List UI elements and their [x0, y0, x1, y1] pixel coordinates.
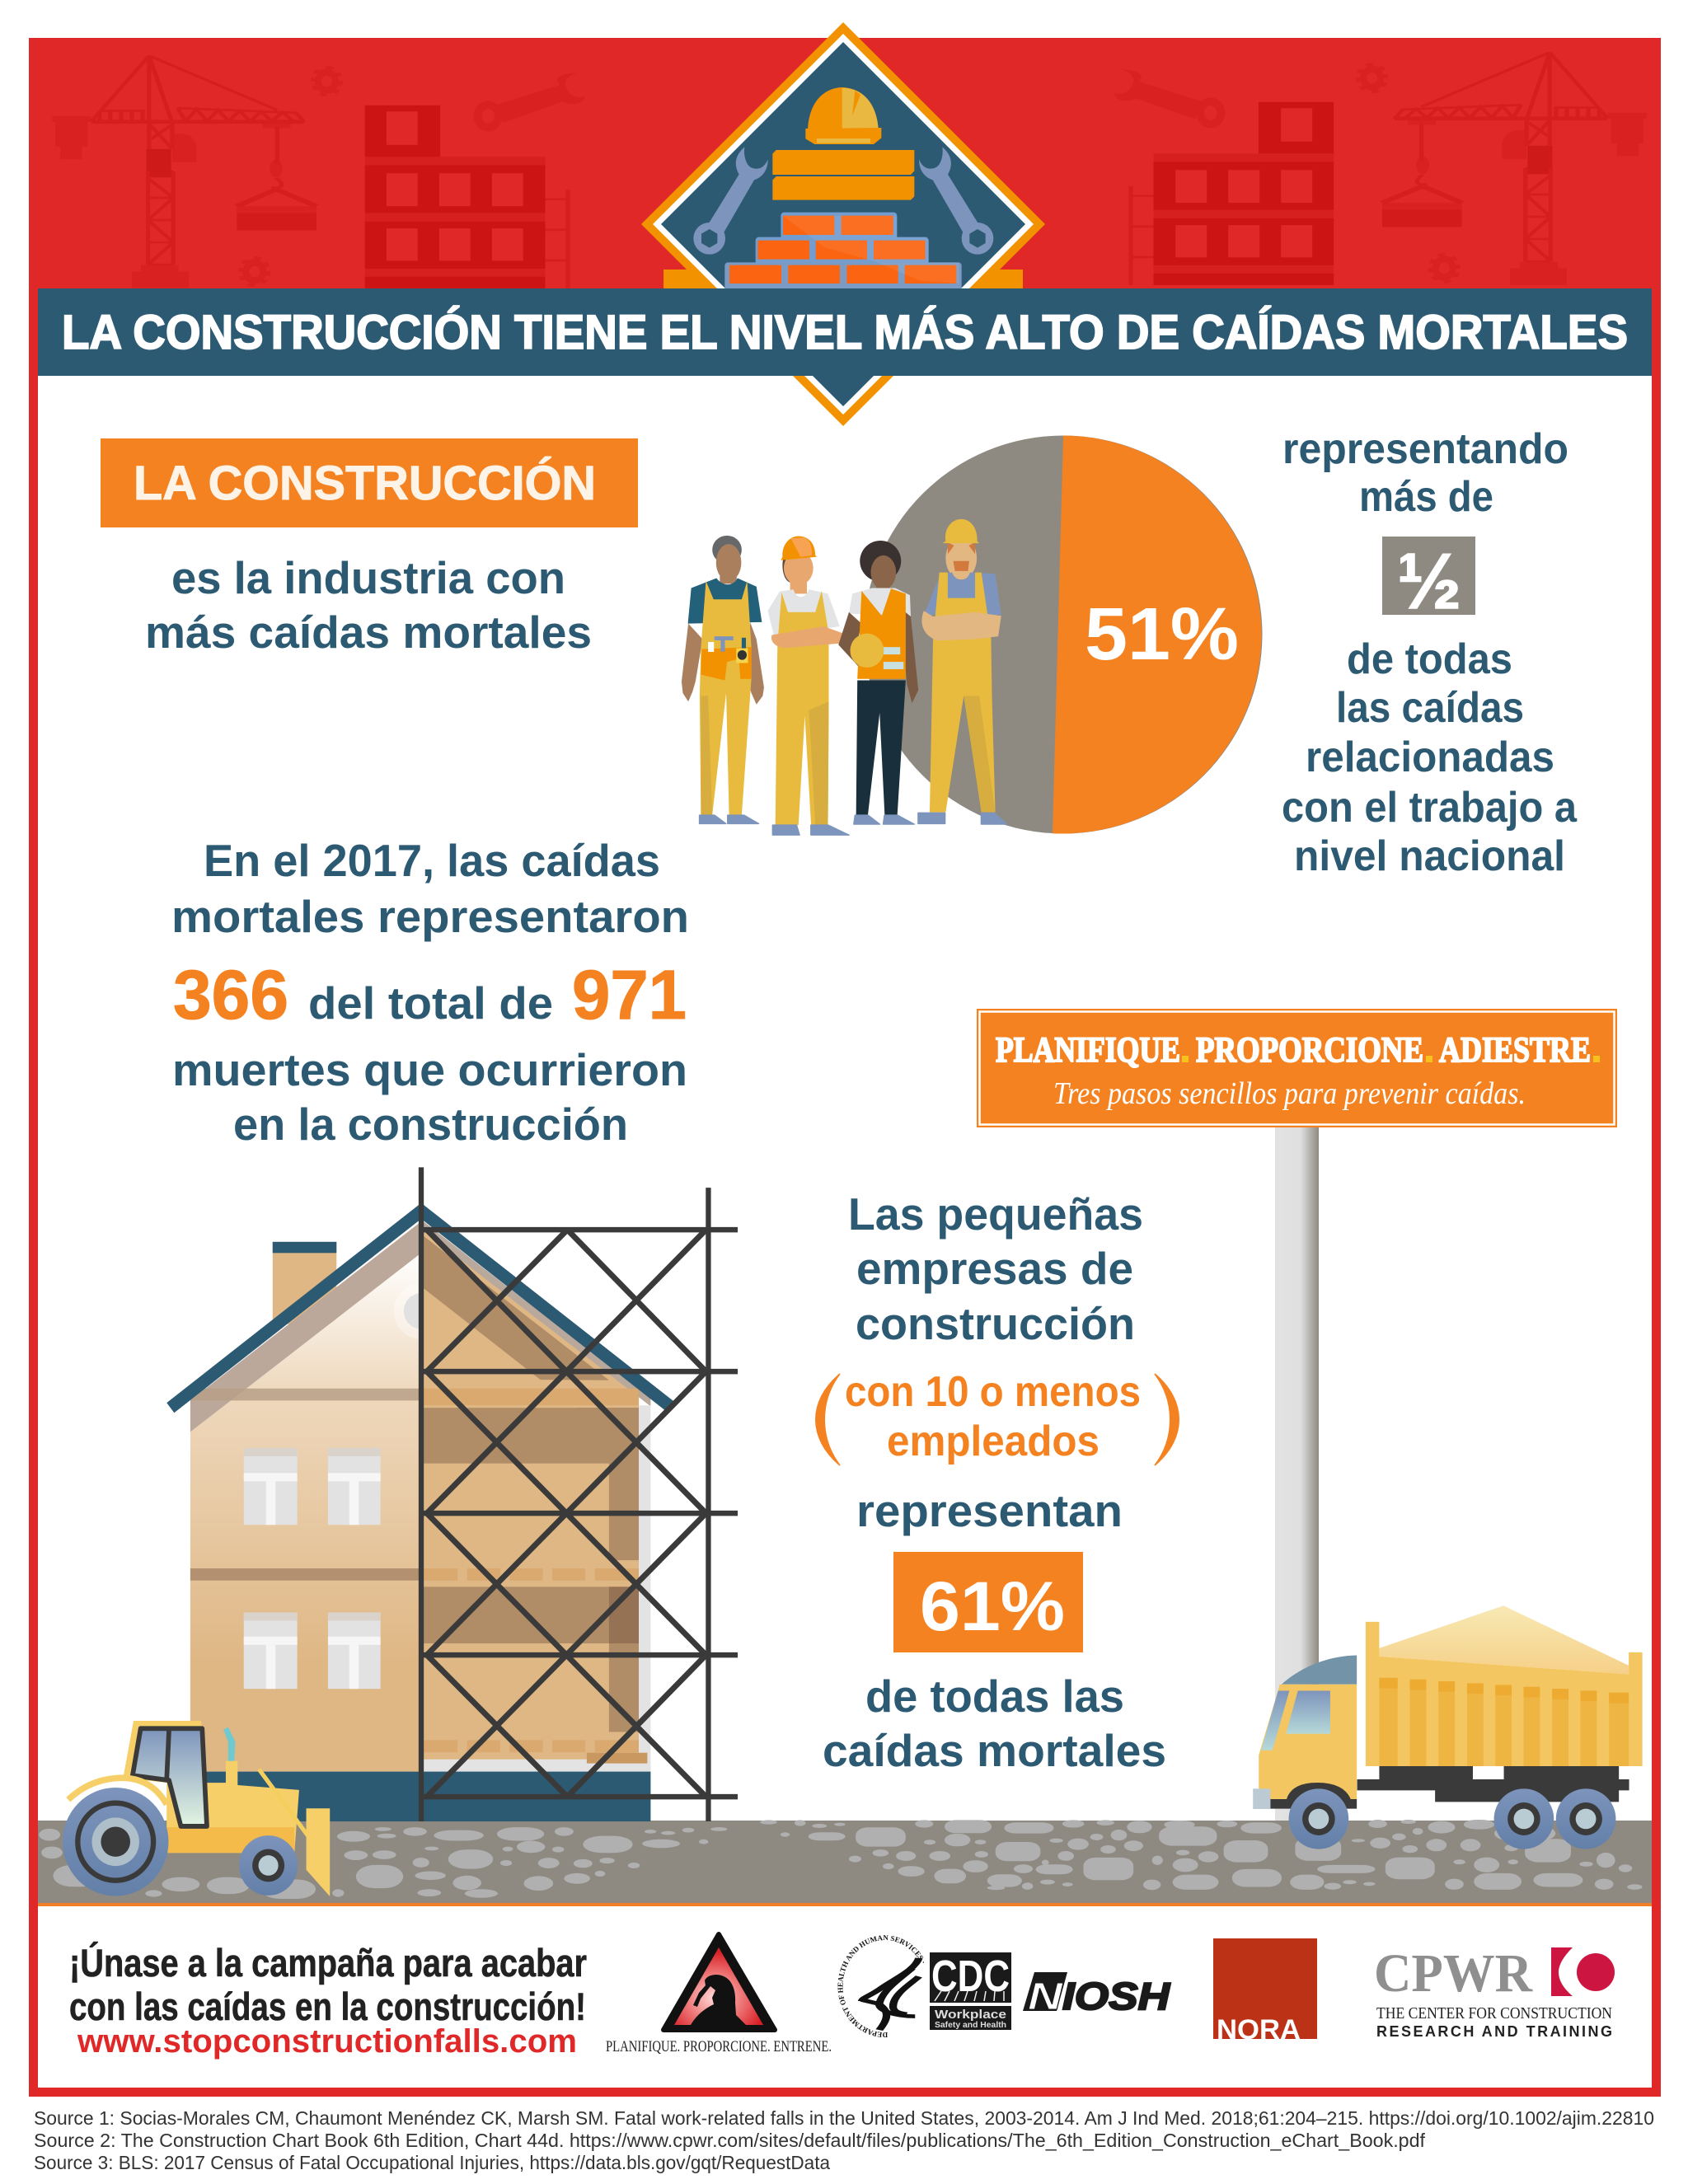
truck cab	[1253, 1656, 1357, 1809]
emblem: diamond with helmet, bricks and wrenches	[641, 22, 1045, 426]
logo: CPWR	[1374, 1943, 1615, 2040]
logo: CDC workplace safety and health: Safety and Health	[935, 2021, 1006, 2030]
text: de todas las caídas relacionadas con el trabajo a nivel nacional: de todas	[1347, 635, 1512, 683]
number 971: 971	[572, 956, 687, 1033]
chimney	[273, 1242, 336, 1324]
worker 1	[682, 536, 764, 823]
text: 2017 statistic 366 of 971: en la construcción	[233, 1099, 628, 1150]
illustration: house under construction with scaffolding	[63, 1167, 738, 1896]
illustration: dump truck	[1253, 1605, 1643, 1849]
worker 3	[838, 541, 918, 824]
text: es la industria con más caídas mortales: es la industria con	[171, 552, 565, 603]
worker 4	[918, 519, 1006, 824]
text: las pequeñas empresas de construcción: Las pequeñas	[848, 1188, 1143, 1240]
logo: NIOSH: N	[1028, 1975, 1063, 2018]
text: las pequeñas empresas de construcción	[848, 1188, 1143, 1349]
text: las pequeñas empresas de construcción: construcción	[856, 1298, 1135, 1349]
campaign call to action: www.stopconstructionfalls.com	[77, 2023, 577, 2060]
road sign: plan provide train	[977, 1009, 1617, 1127]
badge 61%: 61%	[920, 1568, 1065, 1645]
header silhouettes: crane, gears, building and wrench right	[1114, 53, 1647, 285]
text: las pequeñas empresas de construcción: empresas de	[856, 1243, 1133, 1294]
text: de todas las caídas mortales: de todas las	[865, 1671, 1124, 1722]
text: representando más de: representando	[1282, 425, 1568, 473]
logo: HHS seal	[837, 1935, 925, 2037]
one half badge: ½	[1397, 537, 1461, 626]
truck bed	[1366, 1622, 1643, 1766]
text: de todas las caídas relacionadas con el trabajo a nivel nacional: las caídas	[1336, 684, 1524, 732]
source notes: Source 1: Socias-Morales CM, Chaumont Menéndez CK, Marsh SM. Fatal work-related falls in the United States, 2003-2014. Am J Ind Med. 2018;61:204–215. https://doi.org/10.1002/ajim.22810	[34, 2107, 1654, 2129]
house right wall, under construction	[424, 1221, 650, 1772]
logo: NIOSH	[1023, 1972, 1170, 2018]
logo: CDC workplace safety and health: Workplace	[935, 2008, 1006, 2022]
truck load of sand	[1379, 1605, 1629, 1674]
house left wall	[190, 1221, 448, 1772]
text: 2017 statistic 366 of 971: mortales representaron	[171, 891, 689, 942]
text: es la industria con más caídas mortales	[145, 552, 592, 658]
parenthetical: con 10 o menos empleados: empleados	[887, 1418, 1100, 1465]
text: representando más de	[1282, 425, 1568, 521]
roof	[171, 1211, 672, 1408]
logo: NIOSH: IOSH	[1062, 1975, 1170, 2018]
logo: CPWR: THE CENTER FOR CONSTRUCTION	[1376, 2004, 1612, 2022]
number 366: 366	[173, 956, 288, 1033]
campaign call to action: con las caídas en la construcción!	[69, 1985, 586, 2028]
campaign call to action	[69, 1941, 587, 2060]
text: 2017 statistic 366 of 971: En el 2017, las caídas	[204, 835, 660, 886]
illustration: four construction workers	[682, 519, 1006, 835]
brick pile	[724, 213, 962, 290]
worker 2	[768, 537, 849, 835]
house windows	[244, 1448, 381, 1689]
text: representando más de: más de	[1359, 473, 1493, 521]
text: 2017 statistic 366 of 971: muertes que ocurrieron	[172, 1044, 687, 1095]
logo: NORA	[1213, 1938, 1317, 2046]
road sign: plan provide train: Tres pasos sencillos para prevenir caídas.	[1053, 1076, 1526, 1111]
parenthetical: con 10 o menos empleados: con 10 o menos	[845, 1368, 1141, 1416]
icon: hard hat	[805, 87, 881, 144]
road with cobblestones	[38, 1820, 1652, 1906]
logo: HHS seal: DEPARTMENT OF HEALTH AND HUMAN SERVICES · USA	[837, 1935, 925, 2037]
callout: la construcción	[101, 438, 638, 527]
callout: la construcción: LA CONSTRUCCIÓN	[134, 457, 596, 510]
source notes	[34, 2107, 1654, 2173]
header silhouettes: crane, gears, building and wrench left	[52, 56, 584, 288]
campaign call to action: ¡Únase a la campaña para acabar	[69, 1941, 587, 1985]
logo: CDC workplace safety and health	[930, 1952, 1011, 2030]
text: representan: representan	[856, 1485, 1123, 1536]
logo: stop construction falls triangle	[606, 1934, 832, 2055]
road sign: plan provide train: PROPORCIONE	[1196, 1031, 1423, 1070]
scaffolding	[421, 1167, 738, 1821]
brick bars	[772, 150, 914, 200]
text: 2017 statistic 366 of 971	[171, 835, 689, 1150]
logo: CPWR: RESEARCH AND TRAINING	[1376, 2023, 1612, 2040]
logo: CDC workplace safety and health: CDC	[931, 1952, 1010, 2001]
logo: stop construction falls triangle: PLANIFIQUE. PROPORCIONE. ENTRENE.	[606, 2038, 832, 2055]
text: de todas las caídas relacionadas con el trabajo a nivel nacional: con el trabajo a	[1282, 784, 1578, 832]
truck wheels	[1289, 1788, 1615, 1849]
badge 61%	[893, 1552, 1083, 1652]
source notes: Source 3: BLS: 2017 Census of Fatal Occupational Injuries, https://data.bls.gov/gqt/RequestData	[34, 2152, 830, 2173]
text: del total de: del total de	[308, 977, 553, 1029]
pie chart 51%: 51%	[1085, 593, 1239, 676]
blue foundation	[190, 1772, 650, 1821]
logo: NORA: NORA	[1217, 2014, 1301, 2046]
illustration: bulldozer	[63, 1721, 330, 1896]
text: de todas las caídas mortales: caídas mortales	[823, 1725, 1166, 1776]
sign pole	[1275, 1127, 1319, 1824]
title banner	[38, 288, 1652, 376]
text: de todas las caídas relacionadas con el trabajo a nivel nacional: nivel nacional	[1294, 832, 1565, 880]
text: de todas las caídas relacionadas con el trabajo a nivel nacional	[1282, 635, 1578, 880]
source notes: Source 2: The Construction Chart Book 6th Edition, Chart 44d. https://www.cpwr.com/sites/default/files/publications/The_6th_Edition_Construction_eChart_Book.pdf	[34, 2130, 1426, 2151]
text: de todas las caídas relacionadas con el trabajo a nivel nacional: relacionadas	[1306, 733, 1554, 781]
text: es la industria con más caídas mortales: más caídas mortales	[145, 607, 592, 658]
pie chart 51%	[864, 435, 1263, 834]
logo: CPWR: CPWR	[1374, 1943, 1533, 2004]
icon: left wrench	[693, 147, 768, 255]
title banner: LA CONSTRUCCIÓN TIENE EL NIVEL MÁS ALTO DE CAÍDAS MORTALES	[62, 306, 1628, 359]
road sign: plan provide train: PLANIFIQUE	[996, 1031, 1180, 1070]
parenthetical: con 10 o menos empleados	[816, 1368, 1179, 1465]
road sign: plan provide train: ADIESTRE	[1439, 1031, 1591, 1070]
truck chassis	[1357, 1766, 1629, 1802]
icon: right wrench	[919, 147, 993, 255]
text: de todas las caídas mortales	[823, 1671, 1166, 1776]
